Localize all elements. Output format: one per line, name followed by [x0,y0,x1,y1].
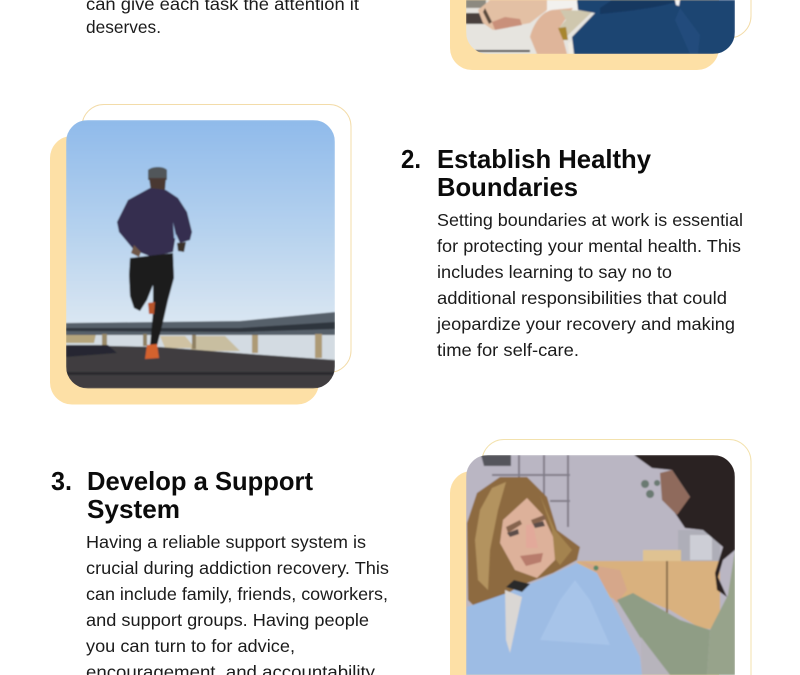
text block: section 2 body: jeopardize your recovery and making [436,314,735,334]
text block: section 2 body: includes learning to say no to [437,262,672,282]
text block: section 3 body [86,532,389,675]
text block: section 2 body [436,210,743,360]
heading: section 3: System [87,494,180,524]
heading: section 2: Boundaries [437,172,578,202]
text block: section 2 body: Setting boundaries at work is essential [437,210,743,230]
text block: section 2 body: time for self-care. [437,340,579,360]
text block: section 2 body: for protecting your mental health. This [437,236,741,256]
heading: section 3 [87,466,313,524]
text block: section 3 body: crucial during addiction recovery. This [86,558,389,578]
heading: section 2 [437,144,652,202]
heading: section 3: Develop a Support [87,466,313,496]
section 3 number: 3. [51,466,72,496]
image card: business hands writing [450,0,751,70]
text block: end of section 1: deserves. [86,17,161,37]
image card: man running [50,104,351,404]
section 2 number: 2. [401,144,421,174]
text block: section 3 body: Having a reliable support system is [86,532,366,552]
text block: section 3 body: and support groups. Having people [86,610,369,630]
text block: end of section 1 [86,0,359,37]
text block: section 3 body: you can turn to for advice, [86,636,295,656]
heading: section 2: Establish Healthy [437,144,652,174]
text block: section 2 body: additional responsibilities that could [437,288,727,308]
text block: section 3 body: can include family, friends, coworkers, [86,584,388,604]
image card: woman comforting man [450,440,751,675]
